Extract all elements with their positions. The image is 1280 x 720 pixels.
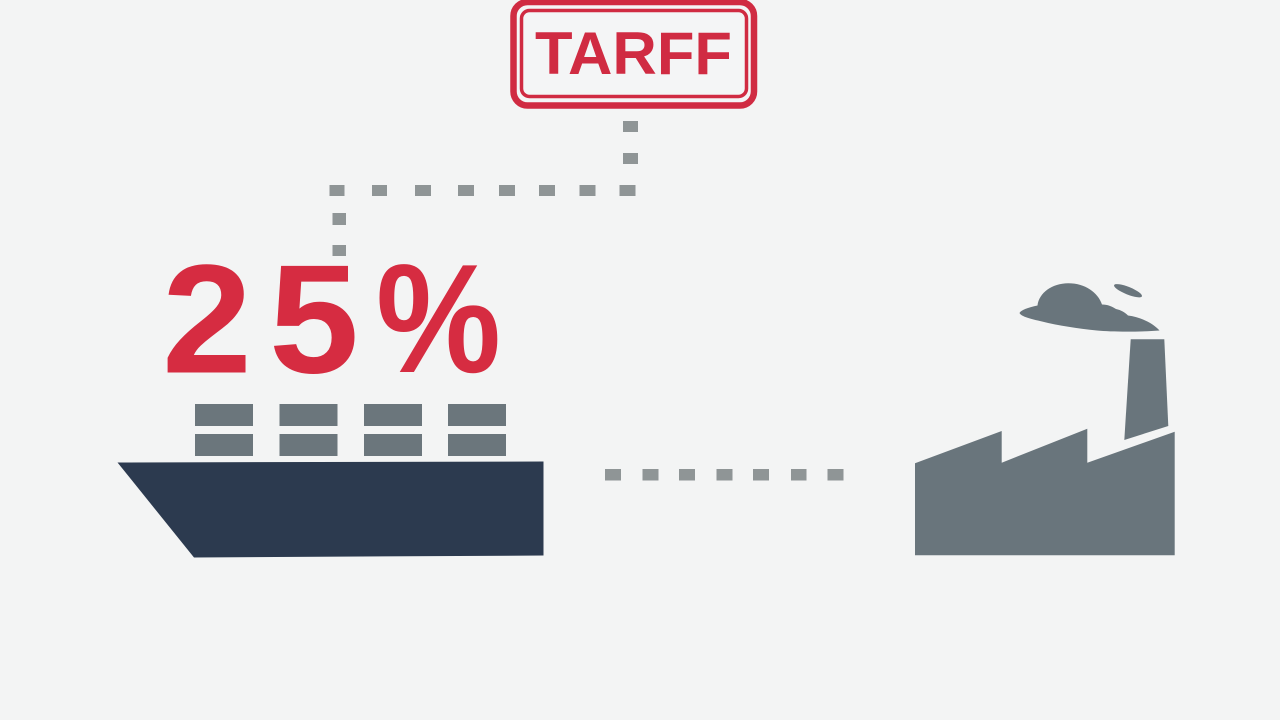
factory chimney	[1124, 339, 1168, 440]
25 percent figure: 2	[162, 232, 252, 406]
factory building	[915, 429, 1175, 555]
25 percent figure	[162, 232, 501, 406]
smoke puff	[1113, 282, 1143, 300]
smoke cloud	[1020, 283, 1160, 332]
badge label: TARFF	[535, 20, 732, 87]
icon: cargo ship	[118, 404, 544, 558]
dotted connector: tariff to ship	[330, 121, 638, 256]
dotted connector: ship to factory	[605, 469, 844, 480]
25 percent figure: %	[376, 232, 501, 405]
icon: factory	[915, 282, 1175, 555]
ship containers	[195, 404, 506, 456]
25 percent figure: 5	[269, 232, 359, 406]
ship hull	[118, 462, 544, 558]
tariff stamp badge	[514, 2, 754, 106]
